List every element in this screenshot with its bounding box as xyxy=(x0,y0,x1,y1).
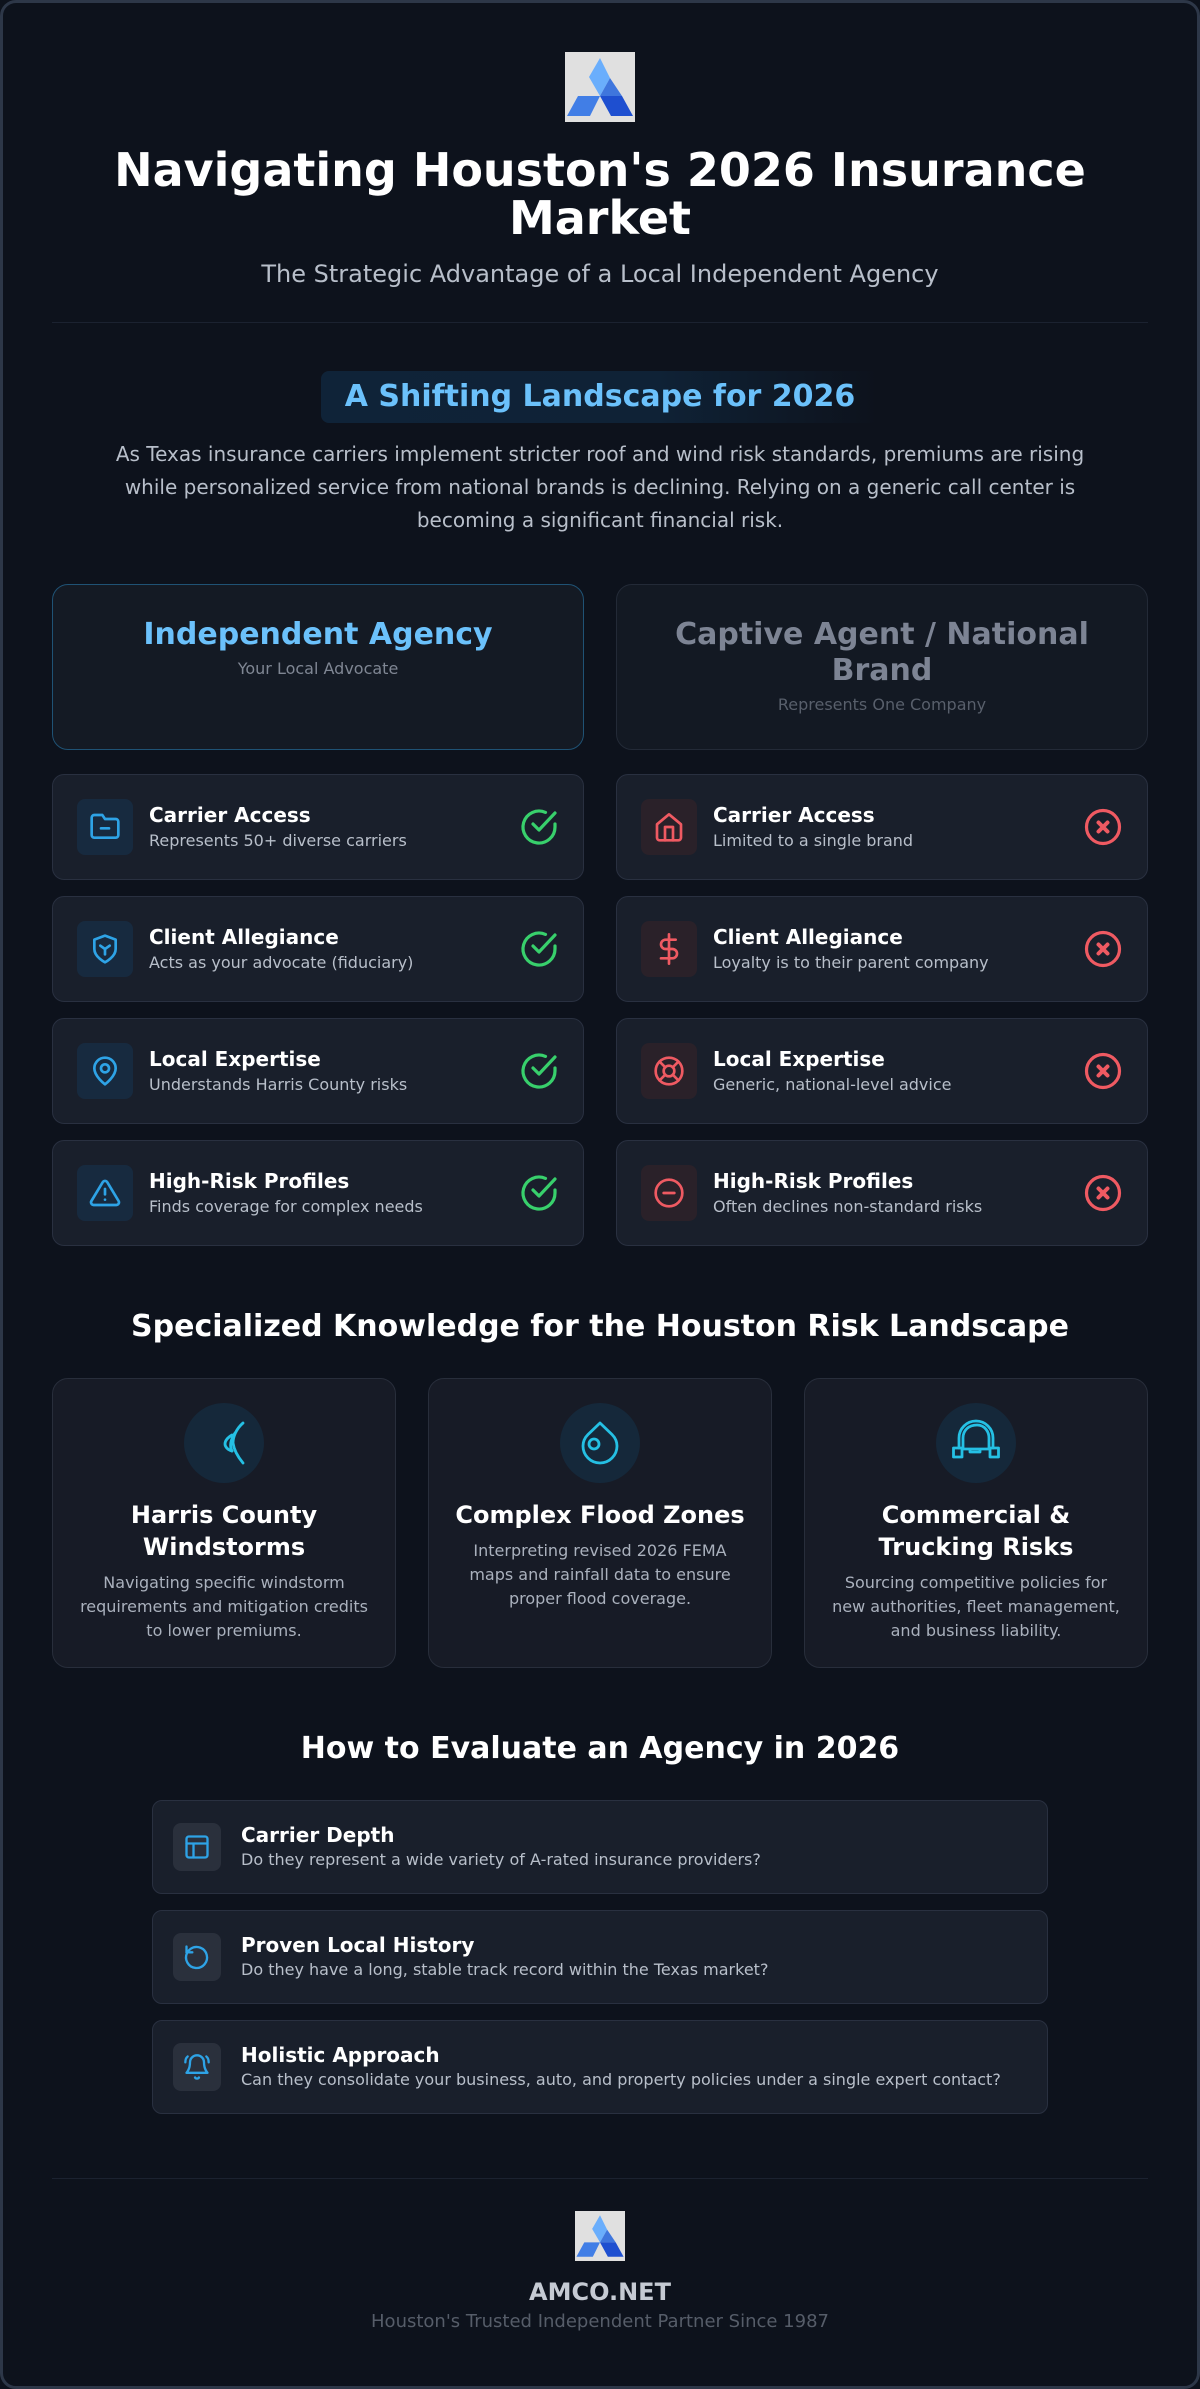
heading: shifting landscape xyxy=(321,371,879,423)
row: independent high-risk profiles xyxy=(52,1140,584,1246)
panel: independent agency header: Your Local Advocate xyxy=(238,659,398,678)
row: captive client allegiance: Loyalty is to their parent company xyxy=(713,953,989,972)
title: Market xyxy=(509,191,691,245)
row: captive carrier access: Carrier Access xyxy=(713,803,875,827)
panel: harris county windstorms: Harris County xyxy=(131,1501,317,1529)
panel: harris county windstorms: Windstorms xyxy=(143,1533,305,1561)
heading: shifting landscape: A Shifting Landscape for 2026 xyxy=(345,379,855,414)
row: independent client allegiance xyxy=(52,896,584,1002)
row: captive local expertise xyxy=(616,1018,1148,1124)
logo: header xyxy=(565,52,635,122)
panel: complex flood zones: Complex Flood Zones xyxy=(455,1501,745,1529)
subtitle: The Strategic Advantage of a Local Independent Agency xyxy=(261,260,939,288)
row: proven local history: Proven Local History xyxy=(241,1933,474,1957)
title xyxy=(114,143,1086,245)
panel: complex flood zones xyxy=(428,1378,772,1668)
intro paragraph xyxy=(116,442,1084,532)
panel: complex flood zones: proper flood coverage. xyxy=(509,1589,691,1608)
row: proven local history: Do they have a long, stable track record within the Texas market? xyxy=(241,1960,768,1979)
icon: magnet arch xyxy=(936,1403,1016,1483)
panel: commercial and trucking risks: Trucking Risks xyxy=(879,1533,1073,1561)
heading: how to evaluate: How to Evaluate an Agency in 2026 xyxy=(301,1731,899,1766)
panel: harris county windstorms: Navigating specific windstorm xyxy=(103,1573,345,1592)
row: independent client allegiance: Client Allegiance xyxy=(149,925,339,949)
intro paragraph: while personalized service from national brands is declining. Relying on a generic call center is xyxy=(125,475,1075,499)
row: captive client allegiance xyxy=(616,896,1148,1002)
footer brand: AMCO.NET xyxy=(529,2278,671,2306)
row: holistic approach xyxy=(152,2020,1048,2114)
heading: specialized knowledge: Specialized Knowledge for the Houston Risk Landscape xyxy=(131,1309,1069,1344)
intro paragraph: As Texas insurance carriers implement stricter roof and wind risk standards, premiums are rising xyxy=(116,442,1084,466)
panel: commercial and trucking risks: and business liability. xyxy=(891,1621,1061,1640)
row: independent carrier access: Represents 50+ diverse carriers xyxy=(149,831,407,850)
row: carrier depth xyxy=(152,1800,1048,1894)
panel: harris county windstorms: to lower premiums. xyxy=(146,1621,302,1640)
panel: independent agency header: Independent Agency xyxy=(143,617,493,652)
panel: complex flood zones: maps and rainfall data to ensure xyxy=(469,1565,731,1584)
row: independent high-risk profiles: Finds coverage for complex needs xyxy=(149,1197,423,1216)
panel: harris county windstorms xyxy=(52,1378,396,1668)
row: holistic approach: Can they consolidate your business, auto, and property policies under a single expert contact? xyxy=(241,2070,1001,2089)
panel: independent agency header xyxy=(52,584,584,750)
panel: captive agent header: Brand xyxy=(832,653,932,688)
row: holistic approach: Holistic Approach xyxy=(241,2043,440,2067)
row: carrier depth: Do they represent a wide variety of A-rated insurance providers? xyxy=(241,1850,761,1869)
panel: commercial and trucking risks: Commercial & xyxy=(882,1501,1070,1529)
row: proven local history xyxy=(152,1910,1048,2004)
row: independent local expertise: Local Expertise xyxy=(149,1047,321,1071)
panel: harris county windstorms: requirements and mitigation credits xyxy=(80,1597,368,1616)
title: Navigating Houston's 2026 Insurance xyxy=(114,143,1086,197)
panel: complex flood zones: Interpreting revised 2026 FEMA xyxy=(473,1541,727,1560)
row: captive high-risk profiles: High-Risk Profiles xyxy=(713,1169,913,1193)
intro paragraph: becoming a significant financial risk. xyxy=(417,508,783,532)
row: captive client allegiance: Client Allegiance xyxy=(713,925,903,949)
icon: droplet xyxy=(560,1403,640,1483)
panel: commercial and trucking risks xyxy=(804,1378,1148,1668)
panel: commercial and trucking risks: new authorities, fleet management, xyxy=(832,1597,1120,1616)
panel: captive agent header xyxy=(616,584,1148,750)
panel: captive agent header: Captive Agent / National xyxy=(675,617,1089,652)
icon: wind crescent xyxy=(184,1403,264,1483)
panel: commercial and trucking risks: Sourcing competitive policies for xyxy=(845,1573,1107,1592)
logo: footer xyxy=(575,2211,625,2261)
row: captive local expertise: Generic, national-level advice xyxy=(713,1075,951,1094)
row: captive carrier access: Limited to a single brand xyxy=(713,831,913,850)
row: independent local expertise xyxy=(52,1018,584,1124)
row: independent carrier access xyxy=(52,774,584,880)
row: carrier depth: Carrier Depth xyxy=(241,1823,394,1847)
row: captive high-risk profiles: Often declines non-standard risks xyxy=(713,1197,982,1216)
row: captive carrier access xyxy=(616,774,1148,880)
row: captive high-risk profiles xyxy=(616,1140,1148,1246)
row: independent carrier access: Carrier Access xyxy=(149,803,311,827)
panel: captive agent header: Represents One Company xyxy=(778,695,986,714)
row: captive local expertise: Local Expertise xyxy=(713,1047,885,1071)
row: independent local expertise: Understands Harris County risks xyxy=(149,1075,407,1094)
footer tagline: Houston's Trusted Independent Partner Since 1987 xyxy=(371,2311,829,2332)
row: independent high-risk profiles: High-Risk Profiles xyxy=(149,1169,349,1193)
row: independent client allegiance: Acts as your advocate (fiduciary) xyxy=(149,953,413,972)
